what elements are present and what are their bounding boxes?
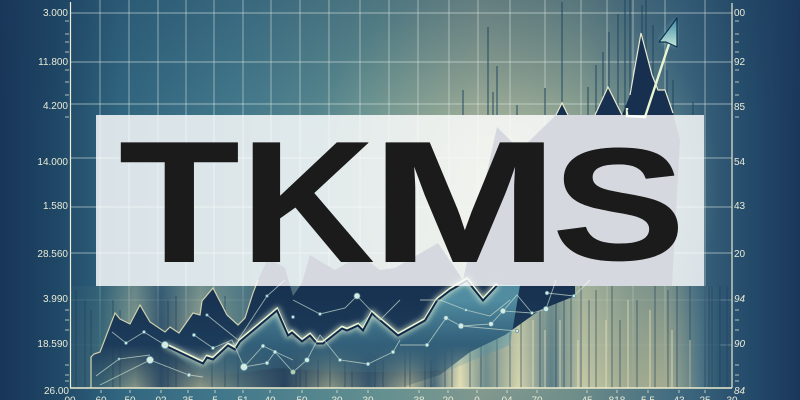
main bright line glow bbox=[165, 280, 497, 363]
left axis: 18.590 bbox=[37, 339, 68, 350]
right axis bbox=[732, 3, 746, 397]
right axis: 90 bbox=[734, 339, 746, 350]
logo wordmark: TKMS: T bbox=[119, 106, 240, 299]
left axis: 28.560 bbox=[37, 249, 68, 260]
vertical streaks in the lower background bbox=[70, 286, 727, 388]
logo wordmark: TKMS: M bbox=[371, 105, 558, 299]
left axis bbox=[37, 2, 70, 397]
teal ribbon under the main line bbox=[165, 280, 520, 378]
left axis: 14.000 bbox=[37, 157, 68, 168]
left axis: 11.800 bbox=[38, 57, 68, 68]
right axis: 85 bbox=[734, 102, 746, 113]
right axis: 94 bbox=[734, 294, 746, 305]
right axis: 92 bbox=[734, 57, 746, 68]
dark area series bbox=[91, 33, 680, 388]
left axis: 26.00 bbox=[44, 386, 69, 397]
thin secondary lines bbox=[96, 280, 590, 385]
icon: rising arrow bbox=[627, 18, 677, 117]
right axis: 00 bbox=[734, 8, 746, 19]
vertical spikes above the panel bbox=[463, 0, 693, 115]
left axis: 3.990 bbox=[43, 294, 68, 305]
left axis: 3.000 bbox=[43, 8, 68, 19]
left axis: 1.580 bbox=[43, 201, 68, 212]
logo wordmark: TKMS: S bbox=[552, 115, 685, 294]
logo wordmark: TKMS bbox=[119, 105, 685, 299]
main line bbox=[165, 279, 497, 364]
left axis: 4.200 bbox=[43, 101, 68, 112]
translucent logo panel bbox=[96, 115, 704, 286]
right axis: 43 bbox=[734, 201, 746, 212]
logo wordmark: TKMS: K bbox=[241, 105, 374, 298]
right axis: 20 bbox=[734, 249, 746, 260]
right axis: 54 bbox=[734, 157, 746, 168]
data point markers bbox=[118, 291, 576, 377]
bottom axis bbox=[64, 388, 738, 400]
right axis: 84 bbox=[734, 386, 746, 397]
